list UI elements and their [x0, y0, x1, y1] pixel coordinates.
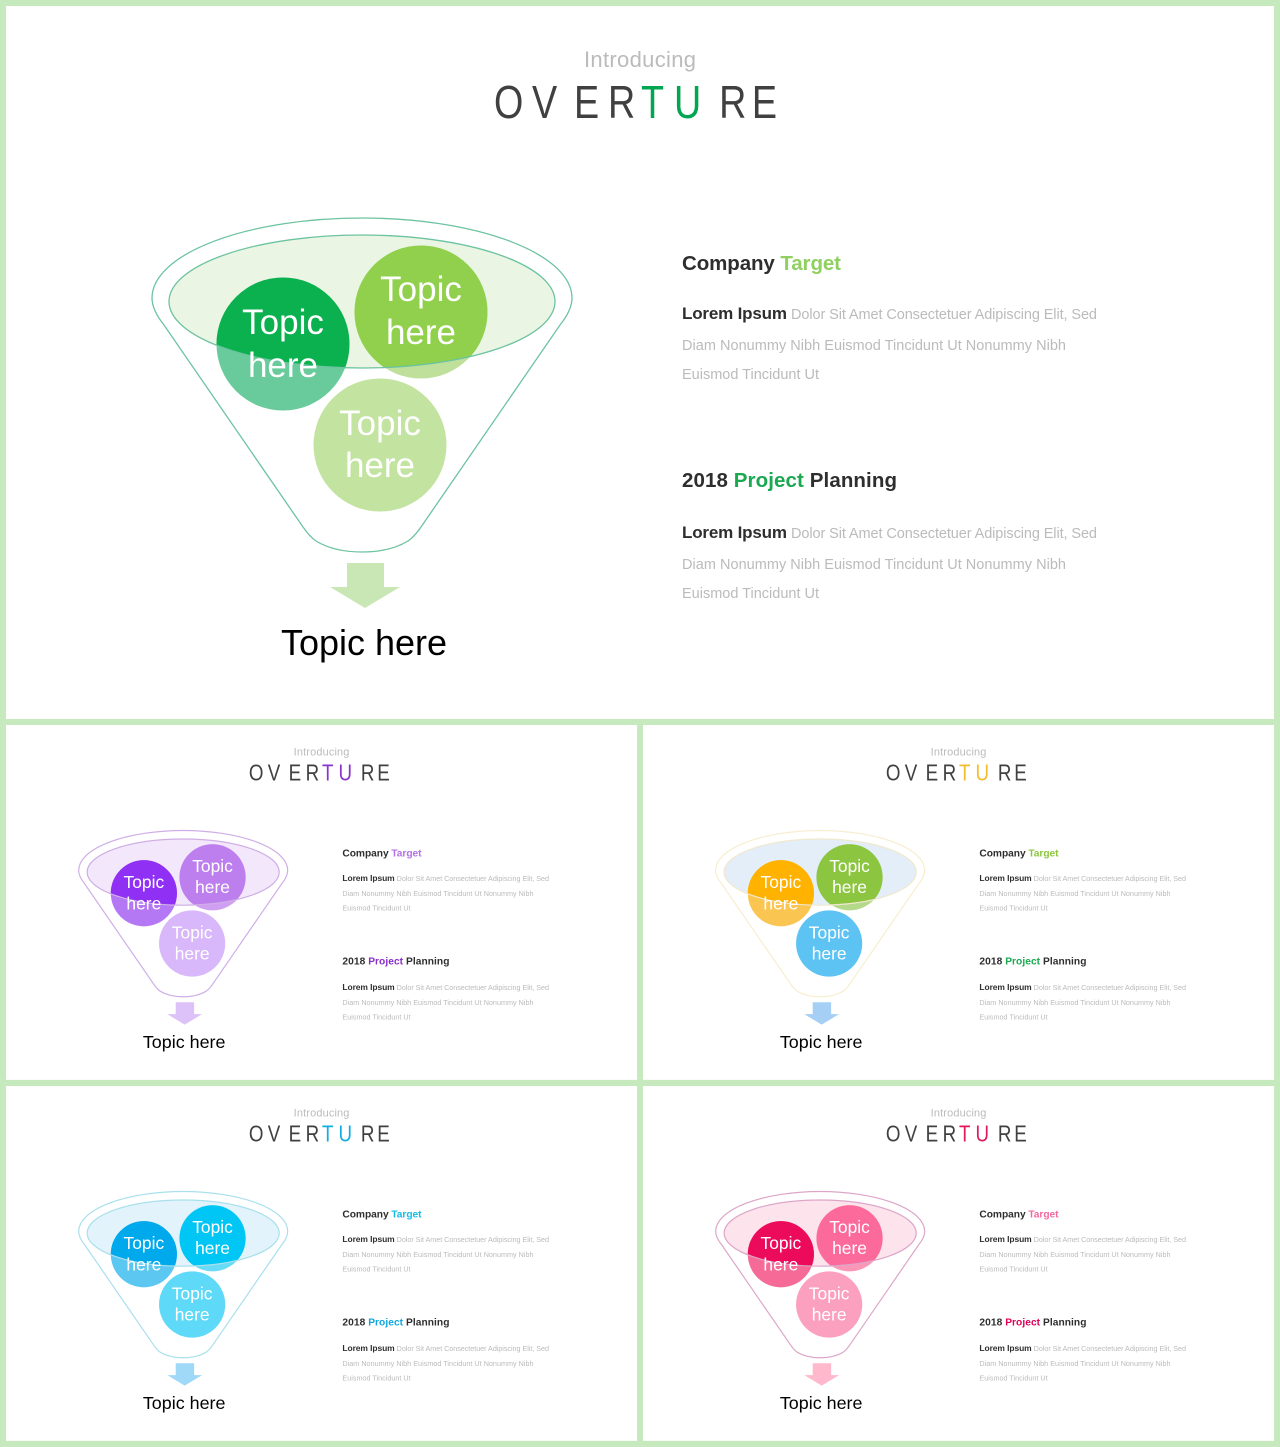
- panel: main green slide: [6, 6, 1274, 719]
- title: purple: O: [249, 761, 263, 786]
- funnel result label: Topic here: [780, 1393, 863, 1413]
- title: blue: U: [338, 1122, 352, 1147]
- funnel chart: purple: [79, 831, 288, 997]
- title: blue: T: [322, 1122, 334, 1147]
- title: blue: Introducing: [294, 1107, 349, 1119]
- funnel chart: pink: Topic: [829, 1217, 870, 1237]
- title: blue: O: [249, 1122, 263, 1147]
- arrow: blue: [167, 1363, 202, 1386]
- funnel chart: blue: Topic: [124, 1233, 164, 1253]
- text block: project planning: Euismod Tincidunt Ut: [682, 586, 819, 602]
- text block: project planning: Euismod Tincidunt Ut: [979, 1013, 1048, 1022]
- text block: project planning: Diam Nonummy Nibh Euismod Tincidunt Ut Nonummy Nibh: [342, 998, 534, 1007]
- funnel chart: green: here: [248, 346, 318, 385]
- title: pink: Introducing: [931, 1107, 986, 1119]
- text block: project planning: Lorem Ipsum: [682, 523, 787, 542]
- title: blue: E: [377, 1122, 390, 1147]
- text block: project planning: Dolor Sit Amet Consectetuer Adipiscing Elit, Sed: [397, 1344, 549, 1353]
- title: green: R: [719, 76, 746, 128]
- title: purple: [249, 746, 390, 786]
- funnel chart: yellow: Topic: [761, 872, 801, 892]
- title: purple: V: [268, 761, 280, 786]
- text block: project planning: Diam Nonummy Nibh Euismod Tincidunt Ut Nonummy Nibh: [342, 1359, 534, 1368]
- title: blue: R: [306, 1122, 319, 1147]
- title: green: R: [608, 76, 635, 128]
- title: pink: O: [886, 1122, 900, 1147]
- funnel result label: Topic here: [143, 1032, 226, 1052]
- title: green: E: [574, 76, 599, 128]
- title: yellow: Introducing: [931, 746, 986, 758]
- title: purple: T: [322, 761, 334, 786]
- text block: project planning: Euismod Tincidunt Ut: [979, 1374, 1048, 1383]
- text block: company target: Euismod Tincidunt Ut: [979, 904, 1048, 913]
- title: purple: Introducing: [294, 746, 349, 758]
- funnel chart: purple: Topic: [124, 872, 164, 892]
- title: blue: [249, 1107, 390, 1147]
- text block: company target: [979, 1209, 1186, 1274]
- text block: company target: Company Target: [682, 252, 841, 275]
- title: purple: R: [361, 761, 374, 786]
- title: yellow: R: [998, 761, 1011, 786]
- title: yellow: E: [926, 761, 938, 786]
- title: purple: R: [306, 761, 319, 786]
- title: pink: R: [943, 1122, 956, 1147]
- text block: company target: Lorem Ipsum: [979, 1234, 1032, 1244]
- funnel chart: green: here: [345, 446, 415, 485]
- title: yellow: [886, 746, 1027, 786]
- text block: company target: Dolor Sit Amet Consectetuer Adipiscing Elit, Sed: [397, 874, 549, 883]
- text block: company target: Euismod Tincidunt Ut: [979, 1265, 1048, 1274]
- arrow: pink: [804, 1363, 839, 1386]
- funnel chart: pink: here: [812, 1304, 847, 1324]
- text block: company target: Company Target: [342, 1209, 422, 1220]
- funnel chart: blue: Topic: [172, 1284, 213, 1304]
- title: pink: T: [959, 1122, 971, 1147]
- title: yellow: O: [886, 761, 900, 786]
- arrow: blue: [804, 1002, 839, 1025]
- title: purple: E: [377, 761, 390, 786]
- text block: company target: Lorem Ipsum: [682, 304, 787, 323]
- text block: project planning: Dolor Sit Amet Consectetuer Adipiscing Elit, Sed: [1034, 1344, 1186, 1353]
- title: pink: E: [926, 1122, 938, 1147]
- funnel result label: Topic here: [281, 622, 447, 663]
- title: blue: E: [289, 1122, 301, 1147]
- title: pink: E: [1014, 1122, 1027, 1147]
- text block: project planning: Diam Nonummy Nibh Euismod Tincidunt Ut Nonummy Nibh: [979, 998, 1171, 1007]
- panel: blue slide: [6, 1086, 637, 1441]
- funnel chart: green: [152, 218, 572, 552]
- funnel chart: green: Topic: [339, 404, 421, 443]
- funnel chart: pink: here: [832, 1238, 867, 1258]
- text block: company target: Dolor Sit Amet Consectetuer Adipiscing Elit, Sed: [1034, 874, 1186, 883]
- text block: company target: Euismod Tincidunt Ut: [342, 1265, 411, 1274]
- text block: project planning: [682, 469, 1097, 602]
- panel: pink slide: [643, 1086, 1274, 1441]
- funnel chart: purple: here: [175, 943, 210, 963]
- title: yellow: E: [1014, 761, 1027, 786]
- funnel chart: pink: Topic: [761, 1233, 801, 1253]
- text block: company target: Diam Nonummy Nibh Euismod Tincidunt Ut Nonummy Nibh: [342, 889, 534, 898]
- text block: company target: Diam Nonummy Nibh Euismod Tincidunt Ut Nonummy Nibh: [979, 889, 1171, 898]
- text block: company target: [342, 848, 549, 913]
- text block: company target: Lorem Ipsum: [979, 873, 1032, 883]
- text block: company target: Euismod Tincidunt Ut: [682, 367, 819, 383]
- text block: company target: Euismod Tincidunt Ut: [342, 904, 411, 913]
- panel: yellow slide: [643, 725, 1274, 1080]
- funnel chart: purple: Topic: [172, 923, 213, 943]
- funnel chart: blue: [79, 1192, 288, 1358]
- text block: company target: Diam Nonummy Nibh Euismod Tincidunt Ut Nonummy Nibh: [682, 338, 1066, 354]
- funnel chart: blue: here: [126, 1255, 161, 1275]
- panel: purple slide: [6, 725, 637, 1080]
- text block: company target: [682, 252, 1097, 383]
- text block: project planning: Diam Nonummy Nibh Euismod Tincidunt Ut Nonummy Nibh: [682, 557, 1066, 573]
- title: yellow: R: [943, 761, 956, 786]
- text block: project planning: 2018 Project Planning: [342, 1317, 449, 1328]
- text block: company target: [342, 1209, 549, 1274]
- title: green: V: [532, 76, 557, 128]
- funnel chart: purple: Topic: [192, 856, 233, 876]
- title: blue: R: [361, 1122, 374, 1147]
- text block: project planning: 2018 Project Planning: [342, 956, 449, 967]
- text block: company target: [979, 848, 1186, 913]
- funnel chart: pink: Topic: [809, 1284, 850, 1304]
- funnel result label: Topic here: [143, 1393, 226, 1413]
- arrow: purple: [167, 1002, 202, 1025]
- text block: project planning: Dolor Sit Amet Consectetuer Adipiscing Elit, Sed: [791, 526, 1097, 542]
- funnel chart: green: Topic: [242, 303, 324, 342]
- funnel chart: pink: here: [763, 1255, 798, 1275]
- title: pink: [886, 1107, 1027, 1147]
- text block: project planning: [342, 956, 549, 1022]
- funnel chart: yellow: here: [763, 894, 798, 914]
- title: green: E: [752, 76, 777, 128]
- text block: project planning: [979, 956, 1186, 1022]
- title: green: [494, 47, 777, 128]
- funnel chart: purple: here: [195, 877, 230, 897]
- text block: project planning: 2018 Project Planning: [979, 956, 1086, 967]
- text block: company target: Dolor Sit Amet Consectetuer Adipiscing Elit, Sed: [397, 1235, 549, 1244]
- text block: project planning: [979, 1317, 1186, 1383]
- funnel chart: purple: here: [126, 894, 161, 914]
- title: green: T: [641, 76, 664, 128]
- title: pink: V: [905, 1122, 917, 1147]
- title: yellow: U: [975, 761, 989, 786]
- title: blue: V: [268, 1122, 280, 1147]
- funnel chart: yellow: here: [832, 877, 867, 897]
- funnel chart: green: Topic: [380, 270, 462, 309]
- text block: project planning: Dolor Sit Amet Consectetuer Adipiscing Elit, Sed: [1034, 983, 1186, 992]
- title: pink: R: [998, 1122, 1011, 1147]
- funnel chart: pink: [716, 1192, 925, 1358]
- title: yellow: T: [959, 761, 971, 786]
- funnel chart: yellow: here: [812, 943, 847, 963]
- funnel result label: Topic here: [780, 1032, 863, 1052]
- text block: company target: Lorem Ipsum: [342, 1234, 395, 1244]
- title: yellow: V: [905, 761, 917, 786]
- text block: project planning: Euismod Tincidunt Ut: [342, 1013, 411, 1022]
- text block: project planning: 2018 Project Planning: [979, 1317, 1086, 1328]
- text block: company target: Company Target: [342, 848, 422, 859]
- funnel chart: blue: Topic: [192, 1217, 233, 1237]
- text block: project planning: [342, 1317, 549, 1383]
- text block: project planning: Euismod Tincidunt Ut: [342, 1374, 411, 1383]
- text block: project planning: Dolor Sit Amet Consectetuer Adipiscing Elit, Sed: [397, 983, 549, 992]
- arrow: green: [330, 563, 400, 608]
- text block: company target: Company Target: [979, 1209, 1059, 1220]
- text block: company target: Lorem Ipsum: [342, 873, 395, 883]
- funnel chart: yellow: Topic: [829, 856, 870, 876]
- text block: company target: Dolor Sit Amet Consectetuer Adipiscing Elit, Sed: [791, 307, 1097, 323]
- funnel chart: green: here: [386, 313, 456, 352]
- funnel chart: blue: here: [175, 1304, 210, 1324]
- funnel chart: yellow: Topic: [809, 923, 850, 943]
- title: green: O: [494, 76, 523, 128]
- text block: project planning: 2018 Project Planning: [682, 469, 897, 492]
- text block: company target: Diam Nonummy Nibh Euismod Tincidunt Ut Nonummy Nibh: [979, 1250, 1171, 1259]
- text block: company target: Diam Nonummy Nibh Euismod Tincidunt Ut Nonummy Nibh: [342, 1250, 534, 1259]
- text block: project planning: Diam Nonummy Nibh Euismod Tincidunt Ut Nonummy Nibh: [979, 1359, 1171, 1368]
- title: green: U: [674, 76, 701, 128]
- text block: company target: Company Target: [979, 848, 1059, 859]
- text block: company target: Dolor Sit Amet Consectetuer Adipiscing Elit, Sed: [1034, 1235, 1186, 1244]
- text block: project planning: Lorem Ipsum: [979, 982, 1032, 992]
- text block: project planning: Lorem Ipsum: [342, 1343, 395, 1353]
- title: pink: U: [975, 1122, 989, 1147]
- text block: project planning: Lorem Ipsum: [342, 982, 395, 992]
- funnel chart: yellow: [716, 831, 925, 997]
- title: purple: U: [338, 761, 352, 786]
- text block: project planning: Lorem Ipsum: [979, 1343, 1032, 1353]
- funnel chart: blue: here: [195, 1238, 230, 1258]
- title: green: Introducing: [584, 47, 696, 72]
- title: purple: E: [289, 761, 301, 786]
